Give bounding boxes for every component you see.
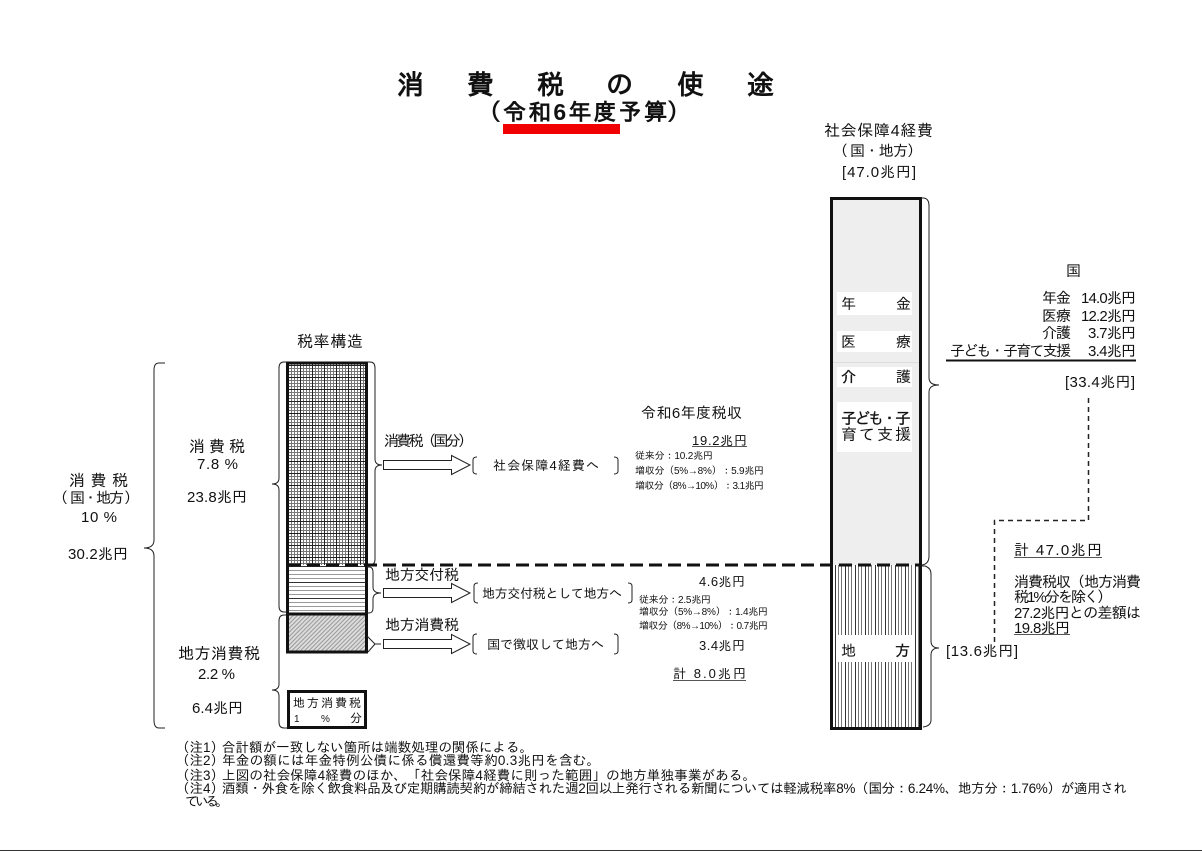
national expense list: 医療 (1042, 308, 1071, 325)
national expense list: 12.2兆円 (1081, 308, 1136, 325)
local total: [13.6兆円] (946, 643, 1018, 660)
label: total consumption tax: （ (53, 490, 68, 507)
brace: national expenses (921, 198, 939, 565)
national expense list: 3.7兆円 (1088, 325, 1136, 342)
national expense list: 子ども・子育て支援 (950, 343, 1071, 360)
label box: child support: 子ども・子 (841, 411, 911, 428)
label box: medical: 医 (841, 334, 856, 351)
heading: four social security expenses (824, 121, 933, 181)
title (397, 70, 775, 100)
label box: medical: 療 (896, 334, 911, 351)
revenue: local consumption and total (673, 638, 746, 681)
heading: tax rate structure: 税率構造 (297, 333, 363, 351)
total and difference note: 計 47.0兆円 (1014, 542, 1102, 559)
segment: national (832, 199, 920, 565)
footnotes: （注2） (176, 753, 224, 768)
brace: 2.2% (272, 615, 287, 728)
footnotes (176, 740, 1127, 809)
label: local consumption tax 2.2%: 地方消費税 (178, 645, 260, 663)
footnotes: （注3） (176, 768, 224, 783)
labels above arrows: 消費税（国分） (384, 433, 473, 450)
usage: local allocation: 地方交付税として地方へ (482, 586, 622, 601)
revenue: national portion: 19.2兆円 (692, 433, 747, 448)
footnotes: 上図の社会保障4経費のほか、「社会保障4経費に則った範囲」の地方単独事業がある。 (222, 768, 756, 783)
national expense list: 国 (1066, 263, 1081, 280)
brace: 7.8% (272, 362, 287, 612)
national expense list: 14.0兆円 (1081, 290, 1136, 307)
subtitle with red underline: 令和6年度予算 (503, 99, 667, 125)
arrow: national portion (384, 456, 470, 474)
heading: four social security expenses: [47.0兆円] (842, 164, 916, 181)
label box: local (837, 635, 912, 662)
revenue: national portion (635, 433, 764, 492)
segment: local allocation tax (288, 565, 366, 614)
usage: local collection (473, 634, 618, 654)
national expense list: 年金 (1042, 290, 1071, 307)
bar: social security expenses (832, 198, 920, 729)
total and difference note: 消費税収（地方消費 (1014, 574, 1141, 591)
label: total consumption tax: 消 費 税 (69, 472, 128, 490)
labels above arrows (384, 433, 473, 634)
box: local consumption tax 1%: 地方消費税 (293, 696, 361, 710)
label: total consumption tax: 10 % (81, 509, 117, 526)
revenue: local consumption and total: 3.4兆円 (699, 638, 745, 653)
revenue: national portion: 増収分（8%→10%）：3.1兆円 (635, 480, 764, 492)
segment: national tax (288, 363, 366, 565)
footnotes: （注4） (176, 781, 224, 796)
box: local consumption tax 1% (288, 692, 366, 728)
label: total consumption tax: ） (124, 490, 139, 507)
brace: local consumption (367, 636, 381, 652)
revenue: local allocation: 4.6兆円 (699, 574, 745, 589)
label box: pension: 金 (896, 296, 911, 313)
title: の (606, 70, 633, 100)
subtitle with red underline: ） (667, 99, 690, 125)
footnotes: 酒類・外食を除く飲食料品及び定期購読契約が締結された週2回以上発行される新聞については軽減税率8%（国分：6.24%、地方分：1.76%）が適用され (222, 781, 1127, 796)
total and difference note: 19.8兆円 (1014, 620, 1070, 637)
revenue: national portion: 増収分（5%→8%）：5.9兆円 (635, 465, 764, 477)
label box: child support (837, 402, 912, 452)
label: total consumption tax: 国・地方 (70, 490, 124, 507)
label: total consumption tax: 30.2兆円 (68, 546, 128, 563)
revenue: local allocation: 増収分（5%→8%）：1.4兆円 (639, 606, 768, 618)
label: national consumption tax 7.8%: 消 費 税 (189, 438, 245, 456)
footnotes: 年金の額には年金特例公債に係る償還費等約0.3兆円を含む。 (222, 753, 600, 768)
label box: local: 地 (841, 643, 856, 660)
brace: local allocation (367, 567, 381, 613)
segment: local (832, 565, 920, 729)
subtitle with red underline: （ (478, 99, 501, 125)
title: 税 (537, 70, 564, 100)
heading: four social security expenses: 国・地方 (850, 143, 908, 160)
revenue heading: 令和6年度税収 (641, 405, 742, 422)
arrow: local allocation (384, 584, 470, 602)
total and difference note (1014, 542, 1141, 637)
label: local consumption tax 2.2%: 2.2 % (198, 666, 235, 683)
label box: medical (837, 331, 912, 352)
label: national consumption tax 7.8%: 7.8 % (197, 456, 238, 473)
heading: four social security expenses: （ (833, 143, 848, 160)
label: national consumption tax 7.8% (187, 438, 247, 506)
title: 使 (677, 70, 704, 100)
revenue: local allocation (639, 574, 768, 632)
brace: local expenses (921, 566, 939, 727)
arrow: local consumption (384, 634, 470, 654)
usage: social security (473, 457, 618, 474)
label box: child support: 育て支援 (841, 426, 911, 444)
heading: four social security expenses: ） (907, 143, 922, 160)
revenue: local allocation: 増収分（8%→10%）：0.7兆円 (639, 620, 768, 632)
label: local consumption tax 2.2%: 6.4兆円 (192, 700, 243, 717)
total and difference note: 税1%分を除く） (1014, 589, 1112, 606)
national expense list (946, 263, 1136, 391)
label box: nursing care: 護 (896, 369, 911, 386)
brace: national portion (367, 362, 382, 565)
revenue: local allocation: 従来分：2.5兆円 (639, 594, 711, 606)
label box: nursing care (837, 367, 912, 387)
divider: national and local (288, 564, 921, 566)
label box: pension: 年 (841, 296, 856, 313)
total and difference note: 27.2兆円との差額は (1014, 605, 1141, 622)
national expense list: 介護 (1042, 325, 1071, 342)
label: total consumption tax (53, 472, 139, 563)
labels above arrows: 地方消費税 (385, 617, 459, 634)
label: national consumption tax 7.8%: 23.8兆円 (187, 489, 247, 506)
title: 費 (467, 70, 494, 100)
title: 途 (747, 70, 775, 100)
label box: nursing care: 介 (841, 369, 856, 386)
national expense list: 3.4兆円 (1088, 343, 1136, 360)
dashed connector (994, 398, 1088, 643)
label box: local: 方 (895, 643, 910, 660)
national expense list: [33.4兆円] (1065, 374, 1135, 391)
box: local consumption tax 1%: 1 (294, 714, 300, 725)
title: 消 (397, 70, 424, 100)
footnotes: ている。 (185, 794, 229, 809)
footnotes: 合計額が一致しない箇所は端数処理の関係による。 (222, 740, 533, 755)
revenue: national portion: 従来分：10.2兆円 (635, 450, 713, 462)
heading: four social security expenses: 社会保障4経費 (824, 121, 933, 140)
segment: local consumption tax (288, 614, 366, 652)
usage: local allocation (474, 583, 632, 603)
usage: local collection: 国で徴収して地方へ (487, 637, 604, 652)
label: local consumption tax 2.2% (178, 645, 260, 717)
revenue: local consumption and total: 計 8.0兆円 (673, 666, 746, 681)
labels above arrows: 地方交付税 (385, 567, 459, 584)
box: local consumption tax 1%: 分 (350, 711, 362, 725)
subtitle with red underline (478, 99, 690, 134)
label box: pension (837, 292, 912, 315)
box: local consumption tax 1%: % (321, 714, 330, 725)
stacked bar: tax rate structure (286, 362, 368, 652)
usage: social security: 社会保障4経費へ (493, 458, 599, 473)
brace: total consumption tax (144, 363, 165, 728)
footnotes: （注1） (176, 740, 224, 755)
